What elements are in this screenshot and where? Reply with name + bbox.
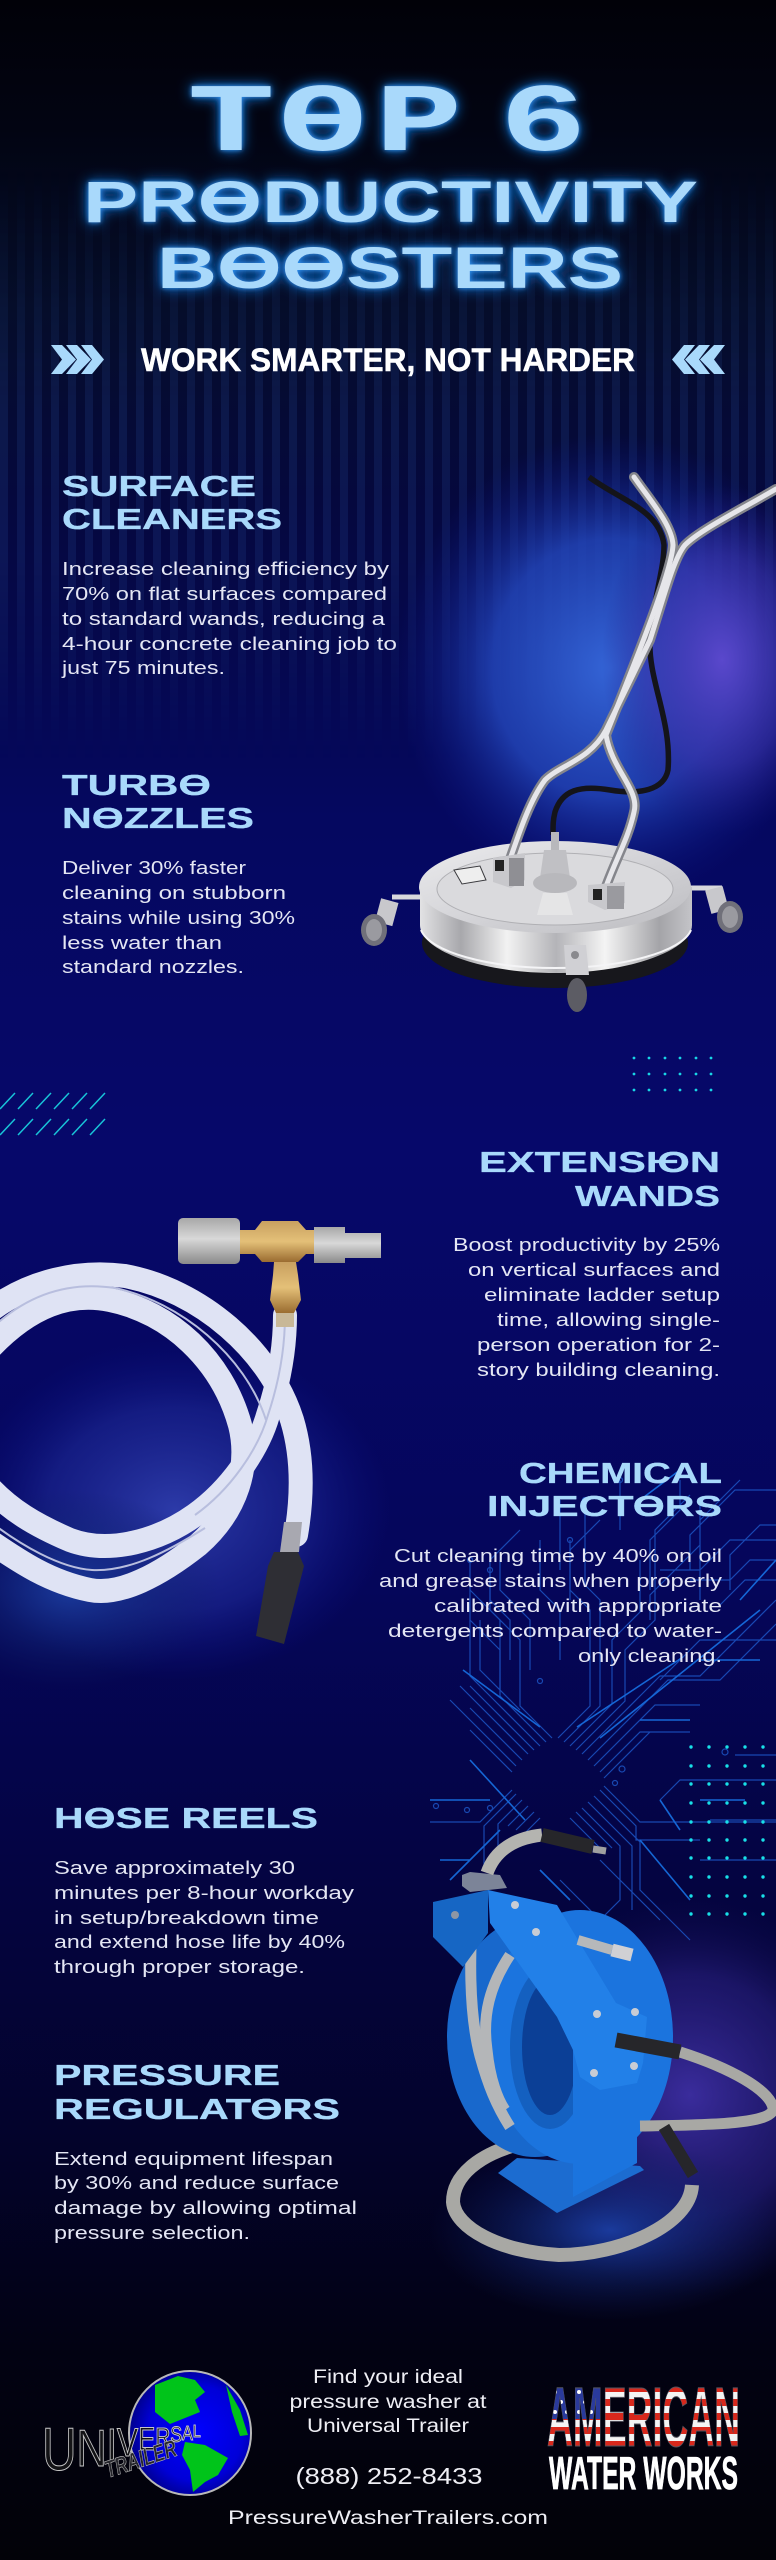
- fittings: [178, 1218, 381, 1327]
- body text: and extend hose life by 40%: [54, 1931, 345, 1952]
- Universal wordmark: I: [107, 2419, 117, 2471]
- icon: left chevrons: [51, 345, 104, 374]
- warning labels: [454, 866, 486, 884]
- body text: eliminate ladder setup: [484, 1284, 720, 1305]
- hose guide: [462, 1872, 507, 1892]
- mesh collar: [280, 1522, 302, 1552]
- body text: and grease stains when properly: [379, 1570, 723, 1591]
- body text: person operation for 2-: [477, 1334, 720, 1355]
- contact text: pressure washer at: [290, 2392, 487, 2413]
- heading: [487, 1458, 722, 1523]
- Universal wordmark: S: [170, 2423, 182, 2448]
- heading: CHEMICAL: [519, 1458, 722, 1490]
- title: PRODUCTIVITY: [83, 170, 698, 235]
- body text: story building cleaning.: [477, 1359, 720, 1380]
- heading: WANDS: [575, 1181, 720, 1213]
- pipe mounts: [493, 853, 625, 910]
- body text: through proper storage.: [54, 1956, 305, 1977]
- body text: Increase cleaning efficiency by: [62, 558, 390, 579]
- body text: stains while using 30%: [62, 907, 295, 928]
- body text: standard nozzles.: [62, 956, 244, 977]
- body text: [453, 1234, 720, 1380]
- outgoing hose: [616, 2040, 773, 2175]
- hose highlights: [0, 1286, 285, 1570]
- wheels and arms: [361, 886, 743, 946]
- base plate: [498, 2158, 644, 2213]
- icon: hose reel: [433, 1835, 773, 2255]
- mounting bracket: [433, 1890, 647, 2090]
- heading: PRESSURE: [54, 2060, 280, 2092]
- heading: [54, 2060, 340, 2126]
- dot grid: circuit right: [689, 1745, 765, 1916]
- strainer: [256, 1552, 304, 1644]
- upright leg: [573, 2040, 637, 2197]
- heading: REGULATORS: [54, 2094, 340, 2126]
- Universal wordmark: N: [77, 2419, 107, 2477]
- logo: Universal Trailer: [42, 2371, 251, 2495]
- body text: by 30% and reduce surface: [54, 2172, 339, 2193]
- heading: INJECTORS: [487, 1491, 722, 1523]
- body text: [379, 1545, 723, 1666]
- Universal wordmark: U: [42, 2416, 77, 2483]
- body text: Cut cleaning time by 40% on oil: [394, 1545, 722, 1566]
- tagline with chevrons: [51, 342, 725, 378]
- contact text: [228, 2367, 548, 2529]
- Universal wordmark: A: [182, 2422, 194, 2444]
- heading: TURBO: [62, 770, 211, 802]
- body text: in setup/breakdown time: [54, 1907, 319, 1928]
- body text: Extend equipment lifespan: [54, 2148, 333, 2169]
- body text: [61, 558, 397, 678]
- pipes: [507, 477, 776, 892]
- title: BOOSTERS: [157, 236, 623, 301]
- hub: [533, 832, 577, 915]
- coiled hose: [471, 1905, 510, 2127]
- black hose: [553, 477, 668, 835]
- Universal wordmark: L: [193, 2422, 201, 2441]
- Trailer wordmark: TRAILER: [102, 2435, 181, 2484]
- panel: extension wands: [453, 1147, 720, 1380]
- hatch marks: [0, 1093, 105, 1135]
- tagline text: WORK SMARTER, NOT HARDER: [141, 342, 635, 378]
- heading: HOSE REELS: [54, 1803, 318, 1835]
- icon: right chevrons: [672, 345, 725, 374]
- body text: on vertical surfaces and: [468, 1259, 720, 1280]
- body text: Boost productivity by 25%: [453, 1234, 720, 1255]
- icon: chemical injector hose: [0, 1218, 381, 1644]
- panel: turbo nozzles: [62, 770, 295, 977]
- title: TOP 6: [188, 70, 587, 180]
- Universal wordmark: V: [117, 2420, 138, 2465]
- body text: 4-hour concrete cleaning job to: [62, 633, 397, 654]
- circuit board pattern: [430, 1470, 776, 1950]
- Universal wordmark: E: [138, 2422, 155, 2458]
- heading: NOZZLES: [62, 803, 254, 835]
- body text: minutes per 8-hour workday: [54, 1882, 355, 1903]
- body text: damage by allowing optimal: [54, 2197, 357, 2218]
- heading: [62, 471, 282, 536]
- heading: [62, 770, 254, 835]
- front wheel: [564, 945, 589, 1012]
- floor hose loop: [453, 2145, 692, 2255]
- dot grid: top right: [633, 1057, 712, 1091]
- panel: surface cleaners: [61, 471, 397, 678]
- body text: cleaning on stubborn: [62, 882, 286, 903]
- globe: [129, 2371, 251, 2495]
- panel: pressure regulators: [54, 2060, 357, 2243]
- heading: CLEANERS: [62, 504, 282, 536]
- swivel: [578, 1940, 632, 1955]
- panel: chemical injectors: [379, 1458, 723, 1666]
- icon: surface cleaner: [361, 477, 776, 1012]
- body text: time, allowing single-: [497, 1309, 720, 1330]
- body text: pressure selection.: [54, 2222, 250, 2243]
- contact text: PressureWasherTrailers.com: [228, 2508, 548, 2529]
- body text: 70% on flat surfaces compared: [62, 583, 387, 604]
- body text: only cleaning.: [578, 1645, 722, 1666]
- front flange: [487, 1910, 673, 2164]
- contact text: (888) 252-8433: [296, 2463, 482, 2489]
- heading: SURFACE: [62, 471, 256, 503]
- title: [83, 70, 698, 301]
- top hose and grip: [487, 1835, 606, 1873]
- body text: [54, 1857, 355, 1977]
- logo: American Water Works: [547, 2370, 740, 2499]
- body text: detergents compared to water-: [388, 1620, 722, 1641]
- heading: EXTENSION: [479, 1147, 720, 1179]
- land: [155, 2376, 248, 2492]
- body text: to standard wands, reducing a: [62, 608, 386, 629]
- panel: hose reels: [54, 1803, 355, 1977]
- body text: Deliver 30% faster: [62, 857, 246, 878]
- body text: [62, 857, 295, 977]
- contact text: Find your ideal: [313, 2367, 463, 2388]
- disc housing: [419, 841, 692, 988]
- footer: [42, 2367, 740, 2529]
- rear flange: [447, 1917, 623, 2157]
- white braided hose: [0, 1274, 301, 1591]
- body text: Save approximately 30: [54, 1857, 295, 1878]
- body text: calibrated with appropriate: [434, 1595, 722, 1616]
- Universal wordmark: R: [155, 2423, 170, 2452]
- heading: [479, 1147, 720, 1213]
- body text: less water than: [62, 932, 222, 953]
- body text: [54, 2148, 357, 2243]
- contact text: Universal Trailer: [307, 2416, 470, 2437]
- body text: just 75 minutes.: [61, 657, 225, 678]
